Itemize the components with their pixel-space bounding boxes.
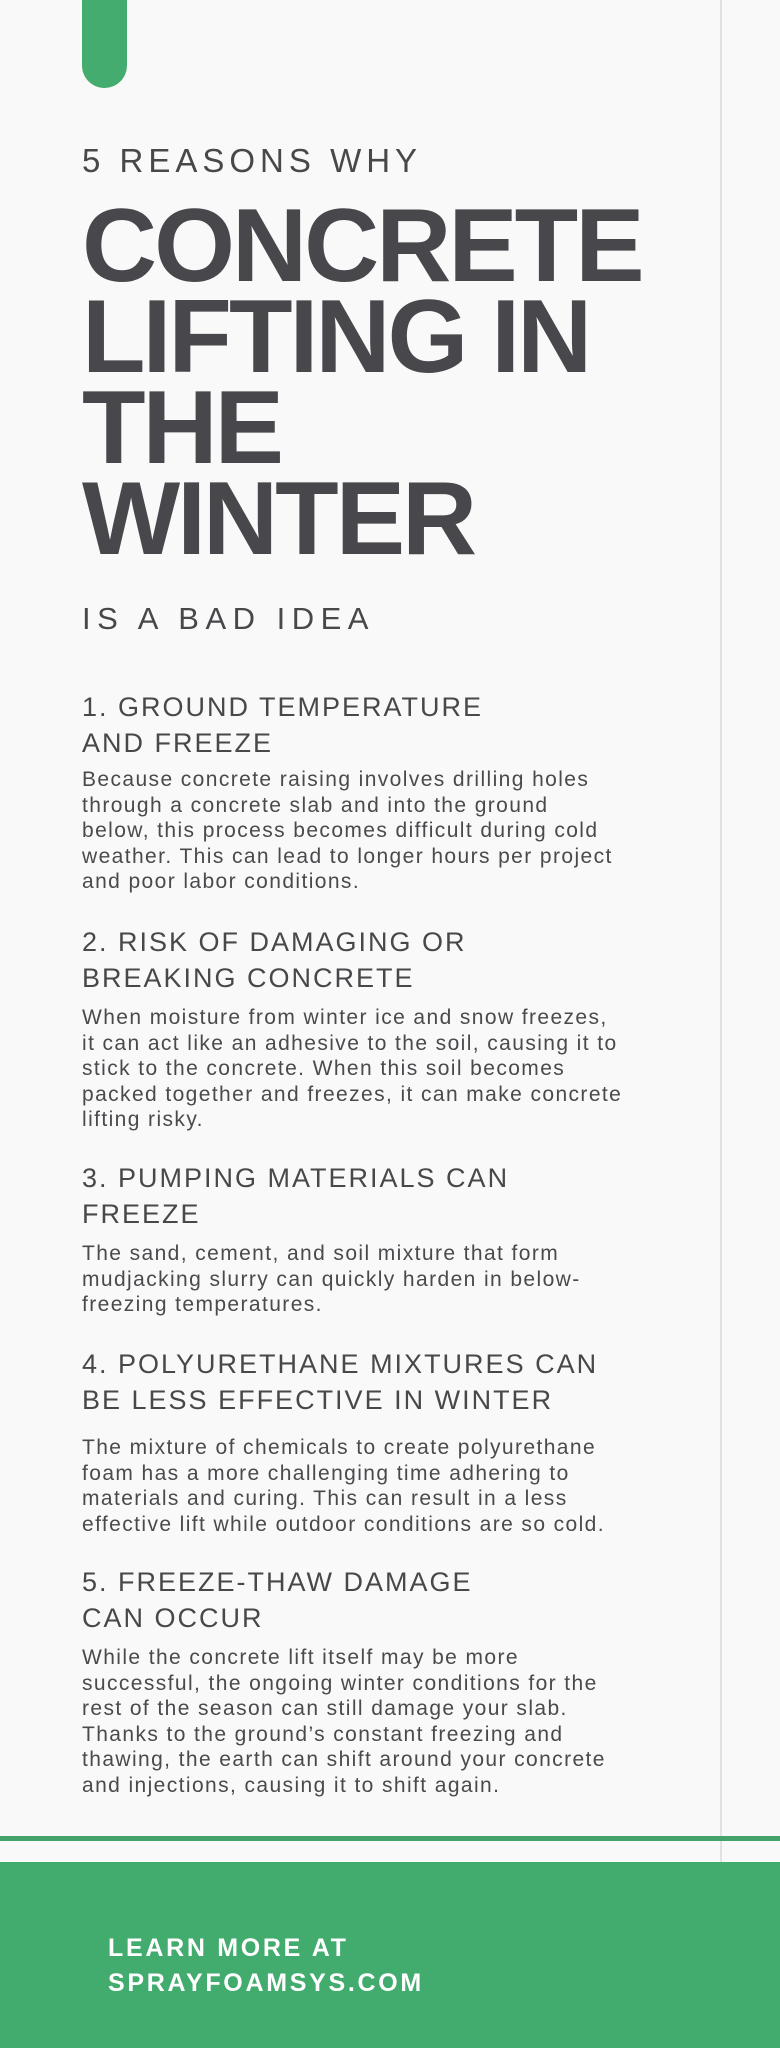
footer call to action: SPRAYFOAMSYS.COM — [108, 1969, 424, 1997]
body 3: freezing temperatures. — [82, 1293, 323, 1316]
body 3: mudjacking slurry can quickly harden in below- — [82, 1268, 581, 1290]
heading 2: BREAKING CONCRETE — [82, 963, 415, 993]
body 1: and poor labor conditions. — [82, 870, 360, 893]
main title: CONCRETE — [82, 188, 642, 304]
body 1: below, this process becomes difficult during cold — [82, 819, 598, 842]
body 4: effective lift while outdoor conditions are so cold. — [82, 1512, 605, 1536]
heading 4: 4. POLYURETHANE MIXTURES CAN — [82, 1349, 598, 1379]
body 2 — [82, 1006, 622, 1131]
body 5: Thanks to the ground’s constant freezing and — [82, 1722, 564, 1746]
heading 1: 1. GROUND TEMPERATURE — [82, 692, 483, 722]
body 2: packed together and freezes, it can make concrete — [82, 1082, 622, 1106]
body 4 — [82, 1436, 605, 1536]
body 1 — [82, 768, 613, 893]
body 5: thawing, the earth can shift around your concrete — [82, 1748, 606, 1771]
heading 3: FREEZE — [82, 1199, 201, 1229]
body 4: foam has a more challenging time adhering to — [82, 1462, 570, 1484]
section 4 — [82, 1349, 605, 1536]
body 5: rest of the season can still damage your slab. — [82, 1697, 568, 1720]
heading 5: 5. FREEZE-THAW DAMAGE — [82, 1567, 473, 1597]
section 5 — [82, 1567, 606, 1796]
body 3: The sand, cement, and soil mixture that form — [82, 1242, 559, 1265]
body 5: and injections, causing it to shift again. — [82, 1774, 500, 1796]
heading 2: 2. RISK OF DAMAGING OR — [82, 927, 467, 957]
footer call to action — [108, 1934, 424, 1997]
body 1: through a concrete slab and into the ground — [82, 794, 548, 816]
body 4: The mixture of chemicals to create polyurethane — [82, 1436, 596, 1459]
subtitle: 5 reasons why: 5 REASONS WHY — [82, 142, 422, 179]
body 5: successful, the ongoing winter conditions for the — [82, 1672, 598, 1694]
heading 1 — [82, 692, 483, 758]
section 1 — [82, 692, 613, 893]
heading 1: AND FREEZE — [82, 728, 273, 758]
body 2: When moisture from winter ice and snow freezes, — [82, 1006, 608, 1029]
body 3 — [82, 1242, 581, 1316]
main title — [82, 188, 642, 577]
body 4: materials and curing. This can result in a less — [82, 1487, 568, 1510]
section 3 — [82, 1163, 581, 1316]
main title: LIFTING IN — [82, 279, 589, 395]
main title: WINTER — [82, 461, 474, 577]
heading 4 — [82, 1349, 598, 1415]
subtitle: is a bad idea: IS A BAD IDEA — [82, 601, 375, 636]
green pill accent — [82, 0, 127, 88]
heading 5: CAN OCCUR — [82, 1603, 264, 1633]
heading 5 — [82, 1567, 473, 1633]
heading 2 — [82, 927, 467, 993]
body 1: Because concrete raising involves drilling holes — [82, 768, 589, 791]
heading 3 — [82, 1163, 509, 1229]
main title: THE — [82, 370, 281, 486]
heading 3: 3. PUMPING MATERIALS CAN — [82, 1163, 509, 1193]
heading 4: BE LESS EFFECTIVE IN WINTER — [82, 1385, 553, 1415]
body 2: it can act like an adhesive to the soil, causing it to — [82, 1032, 618, 1054]
body 5: While the concrete lift itself may be more — [82, 1646, 519, 1669]
body 1: weather. This can lead to longer hours per project — [82, 844, 613, 868]
body 2: lifting risky. — [82, 1108, 204, 1131]
footer call to action: LEARN MORE AT — [108, 1934, 349, 1962]
body 2: stick to the concrete. When this soil becomes — [82, 1057, 565, 1080]
section 2 — [82, 927, 622, 1131]
footer — [0, 1862, 780, 2048]
body 5 — [82, 1646, 606, 1796]
